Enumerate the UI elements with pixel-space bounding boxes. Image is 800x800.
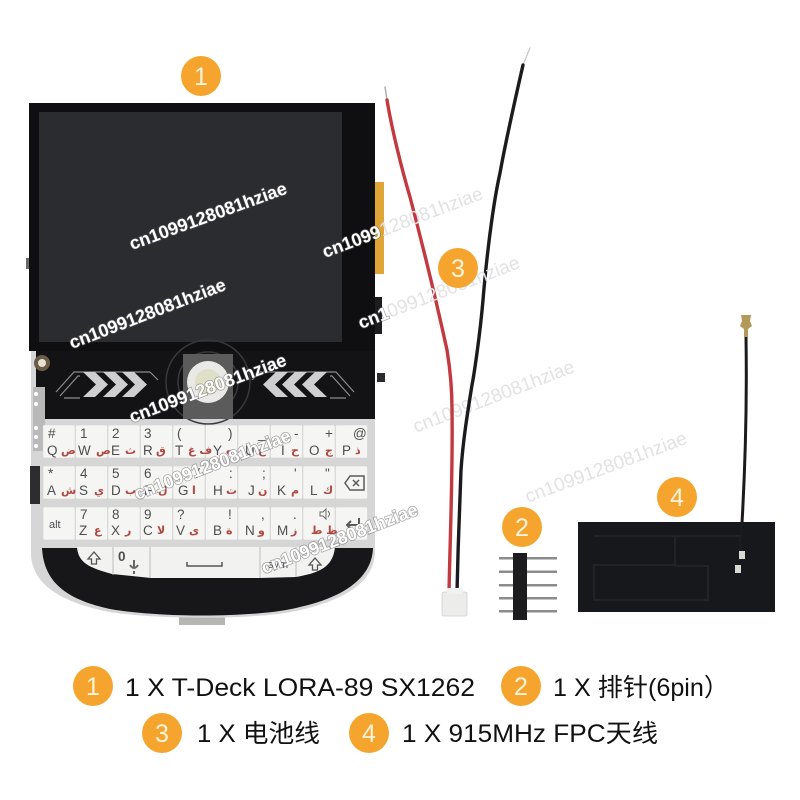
legend item 2: 2	[514, 673, 528, 701]
key legends: P	[342, 443, 351, 458]
solder pads	[739, 551, 745, 559]
key legends: ن	[258, 484, 267, 497]
clear trackball strip	[183, 354, 233, 419]
black wire	[457, 65, 523, 592]
legend item 2: 1 X 排针(6pin）	[553, 674, 729, 702]
key legends: A	[47, 483, 56, 498]
badge 3: 3	[451, 255, 465, 283]
key legends: .	[293, 507, 297, 522]
legend item 3: 3	[155, 720, 169, 748]
red wire	[387, 100, 452, 592]
key legends: ;	[262, 466, 266, 481]
shift icon left	[88, 552, 100, 564]
left chevrons	[83, 372, 147, 397]
key legends: Z	[79, 523, 87, 538]
key legends: م	[291, 484, 299, 497]
screen	[39, 112, 342, 342]
shift icon right	[309, 558, 321, 570]
watermarks on device	[66, 178, 421, 578]
key legends: *	[48, 466, 54, 481]
clear case body	[31, 350, 375, 618]
key legends: I	[281, 443, 285, 458]
right chevrons	[263, 372, 327, 397]
display module	[29, 103, 375, 351]
key legends: ذ	[355, 444, 361, 457]
watermarks crossing device edge	[319, 184, 523, 334]
legend item 1: 1 X T-Deck LORA-89 SX1262	[125, 674, 475, 702]
bottom key row: sym	[268, 559, 288, 571]
key legends: S	[79, 483, 88, 498]
key legends: ت	[226, 484, 237, 497]
key legends	[47, 426, 367, 538]
badge 4: 4	[670, 484, 684, 512]
key legends: 3	[144, 426, 152, 441]
key legends: C	[143, 523, 153, 538]
key legends: 5	[112, 466, 120, 481]
key legends: ل	[158, 484, 168, 497]
key legends: ى	[189, 524, 199, 537]
keyboard key rows	[43, 425, 368, 540]
key legends: U	[245, 443, 255, 458]
antenna cable	[740, 337, 746, 556]
red wire tip	[385, 87, 387, 100]
key legends: E	[111, 443, 120, 458]
watermarks on white background	[410, 357, 690, 508]
key legends: /	[196, 466, 200, 481]
left side button	[26, 258, 30, 269]
key legends: )	[228, 426, 232, 441]
key legends: J	[248, 483, 255, 498]
key legends: (	[177, 426, 182, 441]
key legends: T	[175, 443, 183, 458]
cable: battery wire	[385, 48, 530, 592]
key legends: Q	[47, 443, 58, 458]
legend item 4	[349, 713, 658, 753]
key legends: M	[277, 523, 288, 538]
key legends: N	[245, 523, 255, 538]
device: T-Deck	[26, 103, 421, 625]
battery connector	[442, 588, 467, 616]
key legends: alt	[49, 519, 61, 531]
legend item 2	[501, 666, 729, 706]
key legends: +	[325, 426, 333, 441]
key legends: L	[310, 483, 318, 498]
key legends: F	[144, 483, 152, 498]
bottom black bumper	[42, 548, 373, 616]
key legends: ب	[125, 484, 136, 497]
key legends: ع	[94, 524, 102, 537]
key legends: ص	[96, 444, 111, 457]
key legends: ق	[156, 444, 166, 457]
key legends: -	[294, 426, 298, 441]
key legends: @	[353, 426, 367, 441]
watermarks on white background: cn1099128081hziae	[522, 428, 690, 508]
key legends: :	[229, 466, 233, 481]
key legends: ه	[226, 444, 232, 457]
u.fl connector	[740, 315, 752, 337]
legend item 1	[73, 666, 475, 706]
key legends: خ	[258, 444, 266, 457]
key legends: !	[228, 507, 232, 522]
circuit board with chevrons	[34, 340, 375, 424]
key legends: B	[213, 523, 222, 538]
key legends: ف غ	[188, 444, 212, 457]
key legends: 1	[80, 426, 88, 441]
legend item 1: 1	[86, 673, 100, 701]
mounting hole	[34, 355, 50, 371]
key legends: X	[111, 523, 120, 538]
watermarks on device: cn1099128081hziae	[258, 500, 421, 578]
legend	[73, 666, 729, 753]
key legends: ض	[61, 444, 76, 457]
key legends: ?	[177, 507, 185, 522]
badge 4	[657, 477, 697, 517]
bottom key row: 0	[118, 549, 126, 564]
key legends: ح	[291, 444, 299, 457]
key legends: ر	[124, 524, 131, 537]
key legends: 7	[80, 507, 88, 522]
microphone icon	[130, 560, 138, 574]
key legends: V	[176, 523, 185, 538]
key legends: ز	[290, 524, 297, 537]
watermarks crossing device edge: cn1099128081hziae	[319, 184, 486, 263]
key legends: D	[111, 483, 121, 498]
key legends: G	[178, 483, 189, 498]
legend item 3: 1 X 电池线	[197, 720, 320, 748]
trackball	[187, 361, 229, 403]
badge 2	[502, 507, 542, 547]
legend item 4: 4	[362, 720, 376, 748]
key legends: K	[277, 483, 286, 498]
key legends: ة	[226, 524, 232, 537]
key legends: H	[213, 483, 223, 498]
watermarks on device: cn1099128081hziae	[127, 178, 289, 254]
key legends: ك	[323, 484, 333, 497]
USB-C port	[179, 610, 225, 625]
key legends: 6	[144, 466, 152, 481]
key legends: ,	[261, 507, 265, 522]
speaker icon	[320, 509, 330, 519]
key legends: و	[257, 524, 265, 537]
concentric rings around trackball	[166, 340, 250, 424]
key legends: لا	[157, 524, 165, 537]
badge 1	[181, 56, 221, 96]
FPC antenna	[578, 315, 775, 612]
decorative circuit lines left and right	[56, 372, 158, 398]
watermarks on device: cn1099128081hziae	[66, 275, 229, 353]
bottom key row	[77, 547, 335, 578]
watermarks on white background: cn1099128081hziae	[410, 357, 578, 438]
left edge contact pads	[30, 387, 45, 504]
key legends: O	[309, 443, 320, 458]
watermarks crossing device edge: cn1099128081hziae	[355, 253, 523, 334]
key legends: 9	[144, 507, 152, 522]
badge 2: 2	[515, 514, 529, 542]
key legends: _	[257, 426, 266, 441]
key legends: ا	[192, 484, 196, 497]
key legends: ش	[61, 484, 76, 497]
side connector	[375, 297, 382, 334]
key legends: ج	[325, 444, 333, 458]
pin header	[499, 553, 557, 620]
key legends: #	[48, 426, 56, 441]
legend item 3	[142, 713, 320, 753]
legend item 4: 1 X 915MHz FPC天线	[402, 720, 658, 748]
watermarks on device: cn1099128081hziae	[131, 426, 294, 504]
key legends: "	[325, 466, 330, 481]
key legends: W	[78, 443, 91, 458]
space bar mark	[187, 562, 222, 566]
key legends: Y	[213, 443, 222, 458]
key legends: ي	[94, 484, 104, 497]
antenna traces	[594, 536, 740, 600]
side FPC ribbon	[375, 182, 384, 274]
watermarks on device: cn1099128081hziae	[126, 350, 289, 427]
key legends: ظ ط	[311, 524, 338, 537]
key legends: ث	[125, 444, 136, 457]
badge 1: 1	[194, 63, 208, 91]
black wire tip	[523, 48, 530, 65]
key legends: 8	[112, 507, 120, 522]
badge 3	[438, 248, 478, 288]
enter icon	[347, 518, 359, 529]
backspace icon	[345, 476, 364, 490]
key legends: R	[143, 443, 153, 458]
key legends: '	[294, 466, 297, 481]
key legends: 2	[112, 426, 120, 441]
side switch	[377, 373, 385, 382]
key legends: 4	[80, 466, 88, 481]
